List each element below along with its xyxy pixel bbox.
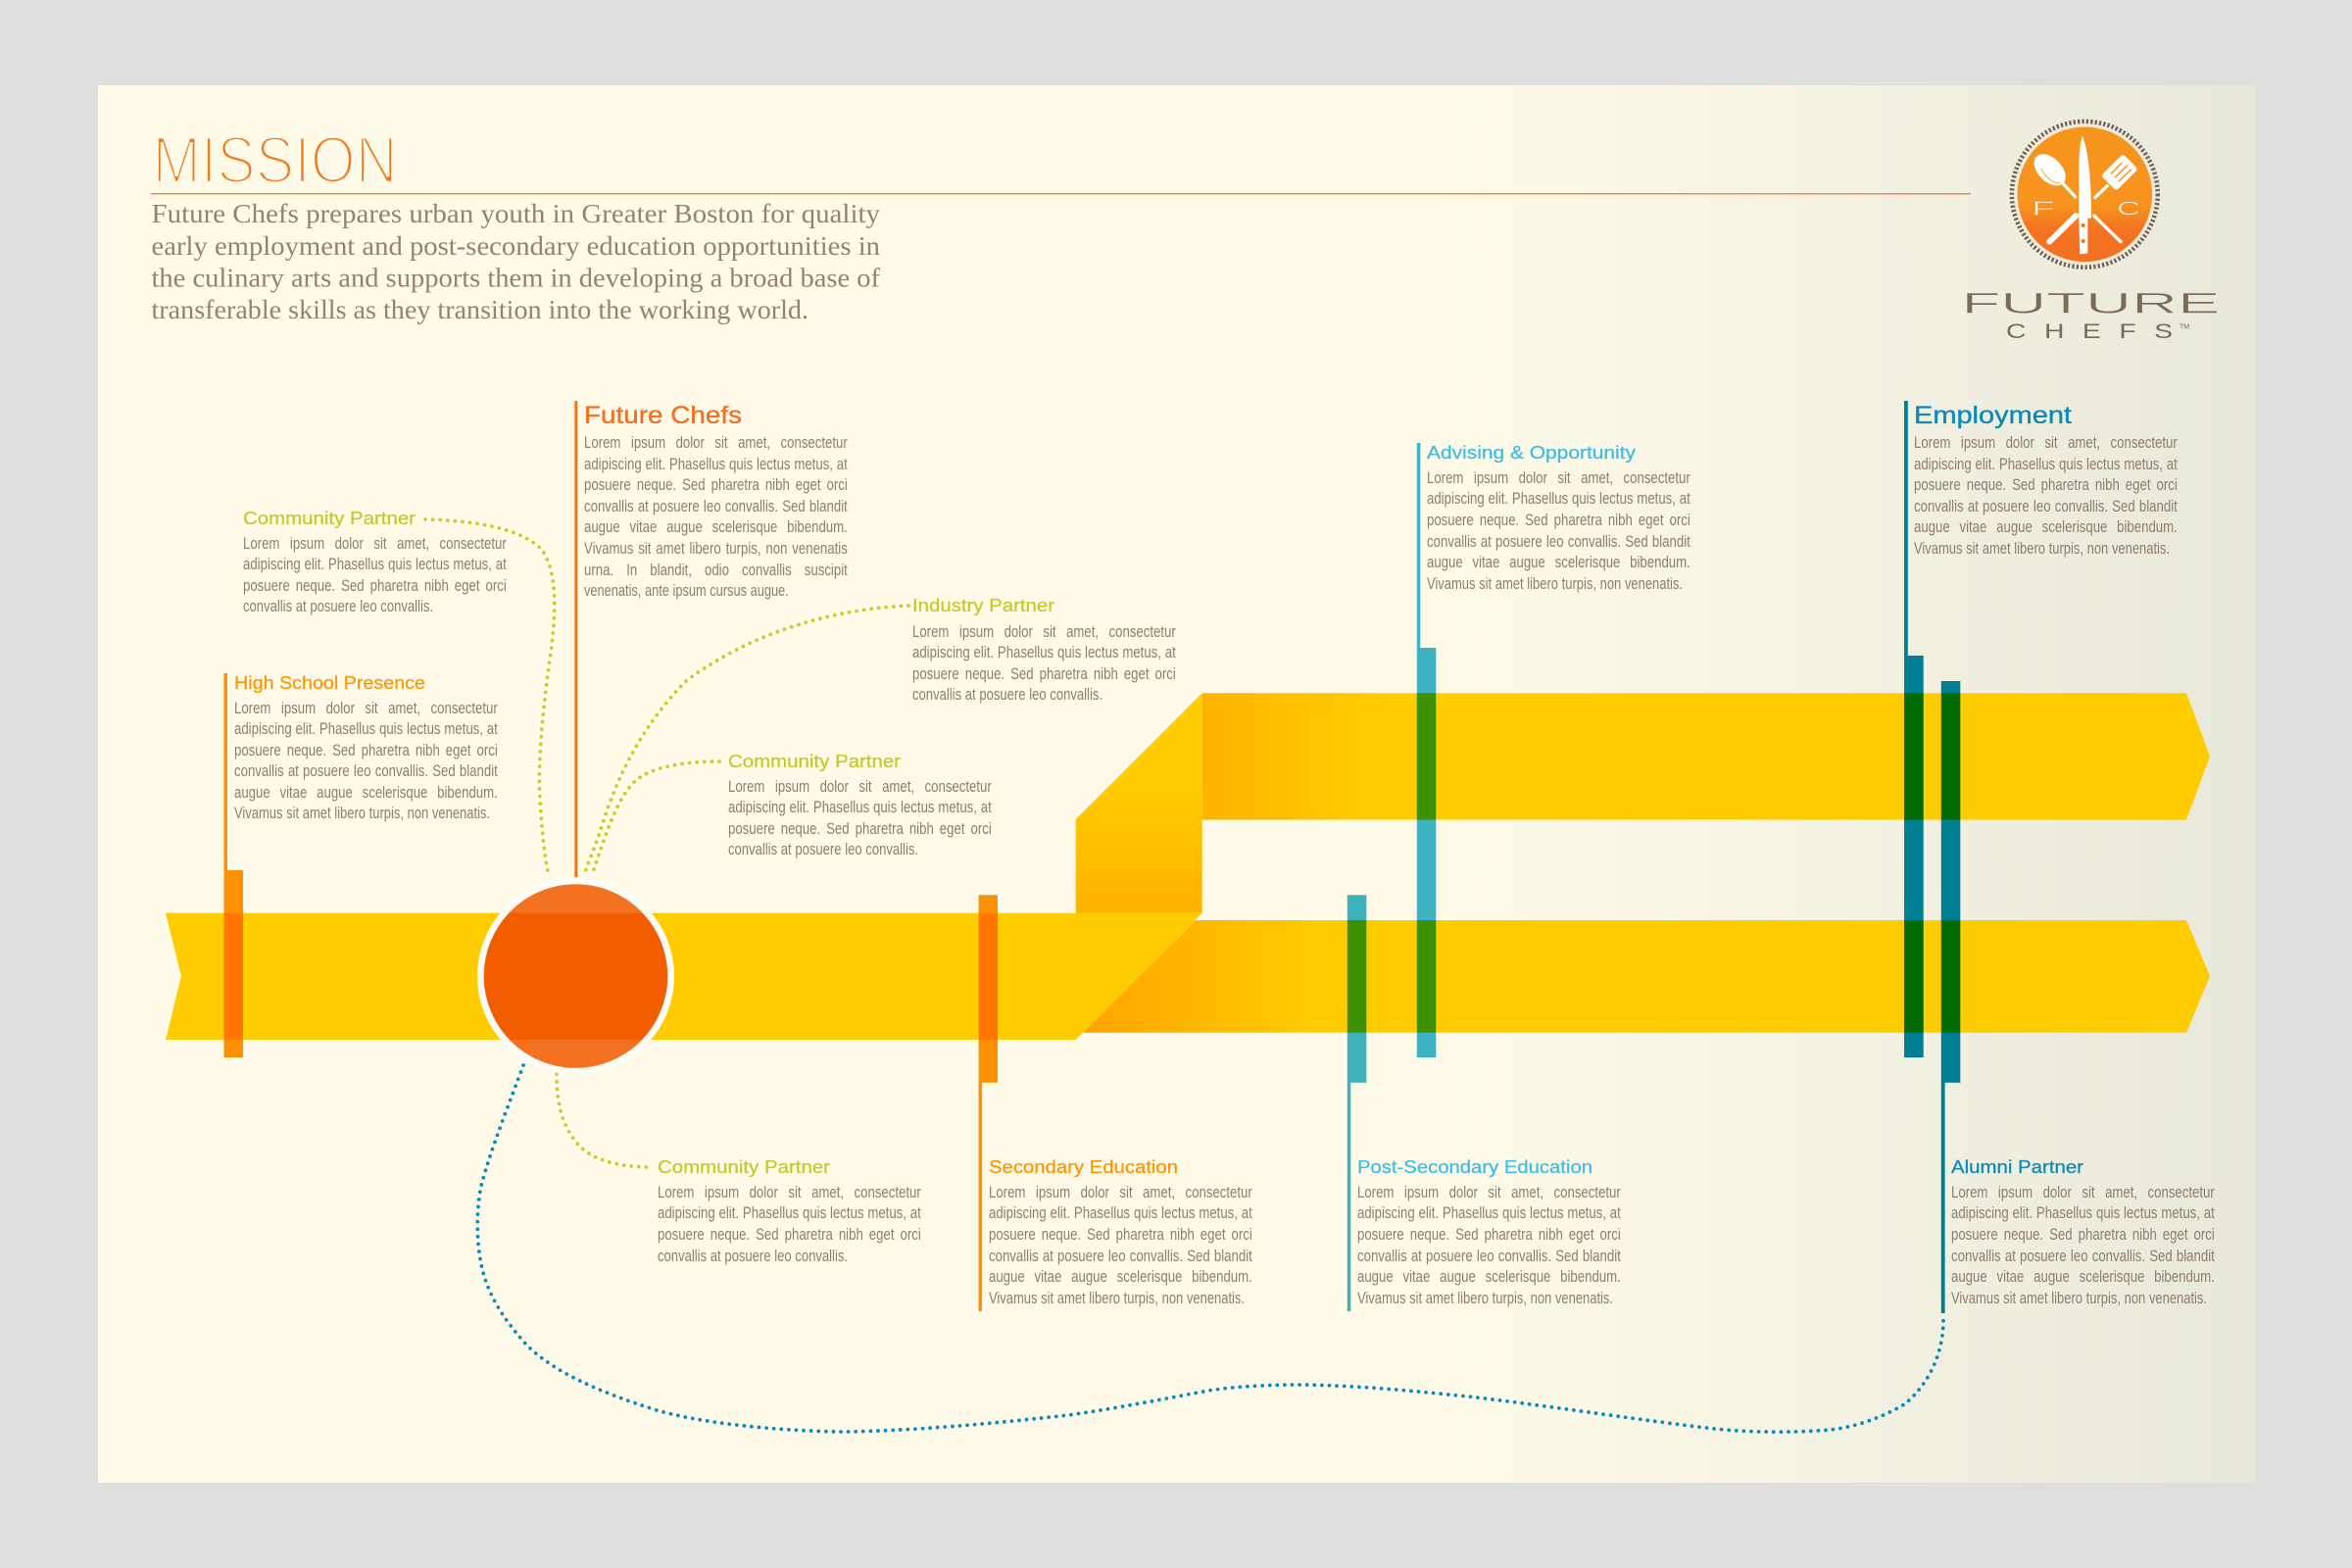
body copy: posuere neque. Sed pharetra nibh eget orci — [911, 665, 1175, 683]
body copy — [1914, 434, 2178, 558]
text block: community partner bottom — [657, 1157, 921, 1265]
title rule — [151, 193, 1971, 194]
body copy: adipiscing elit. Phasellus quis lectus metus, at — [988, 1204, 1251, 1222]
body copy: convallis at posuere leo convallis. Sed blandit — [1914, 498, 2178, 515]
body copy: Lorem ipsum dolor sit amet, consectetur — [234, 700, 498, 717]
body copy — [657, 1184, 921, 1265]
body copy: augue vitae augue scelerisque bibendum. — [1357, 1268, 1621, 1286]
bar: employment — [1904, 401, 1924, 1057]
body copy: augue vitae augue scelerisque bibendum. — [234, 784, 498, 802]
body copy: posuere neque. Sed pharetra nibh eget orci — [1951, 1226, 2215, 1244]
dotted connector: community partner right — [592, 761, 719, 875]
body copy: Lorem ipsum dolor sit amet, consectetur — [243, 535, 507, 553]
heading: Advising & Opportunity — [1427, 443, 1636, 463]
body copy: convallis at posuere leo convallis. — [911, 686, 1102, 704]
text block: community partner middle — [728, 752, 992, 858]
hub circle — [484, 884, 667, 1068]
body copy: convallis at posuere leo convallis. Sed blandit — [584, 498, 848, 515]
text block: employment — [1914, 402, 2178, 558]
body copy: adipiscing elit. Phasellus quis lectus metus, at — [1914, 456, 2178, 473]
body copy: Vivamus sit amet libero turpis, non venenatis. — [234, 805, 490, 822]
bar: advising and opportunity — [1417, 443, 1436, 1057]
logo wordmark: FUTURE — [1962, 287, 2221, 319]
mission statement: the culinary arts and supports them in developing a broad base of — [151, 263, 880, 292]
heading: Employment — [1914, 402, 2072, 429]
body copy: posuere neque. Sed pharetra nibh eget orci — [1357, 1226, 1621, 1244]
text block: future chefs — [584, 402, 848, 600]
heading: Future Chefs — [584, 402, 742, 429]
body copy: adipiscing elit. Phasellus quis lectus metus, at — [728, 799, 992, 816]
body copy: venenatis, ante ipsum cursus augue. — [584, 582, 789, 600]
bar: future chefs stem — [574, 401, 577, 877]
body copy: Lorem ipsum dolor sit amet, consectetur — [1914, 434, 2178, 452]
mission statement: Future Chefs prepares urban youth in Greater Boston for quality — [151, 199, 881, 228]
body copy — [243, 535, 507, 615]
body copy: Lorem ipsum dolor sit amet, consectetur — [728, 778, 992, 796]
body copy — [1951, 1184, 2215, 1307]
bar: alumni partner — [1941, 681, 1960, 1313]
text block: high school presence — [234, 673, 498, 822]
heading: Post-Secondary Education — [1357, 1157, 1592, 1177]
body copy: urna. In blandit, odio convallis suscipit — [584, 562, 848, 579]
body copy: augue vitae augue scelerisque bibendum. — [988, 1268, 1251, 1286]
body copy: Vivamus sit amet libero turpis, non venenatis. — [1914, 540, 2170, 558]
body copy: Lorem ipsum dolor sit amet, consectetur — [1427, 469, 1690, 487]
heading: Alumni Partner — [1951, 1157, 2083, 1177]
body copy: posuere neque. Sed pharetra nibh eget orci — [728, 820, 992, 838]
body copy: Lorem ipsum dolor sit amet, consectetur — [911, 623, 1175, 641]
body copy: adipiscing elit. Phasellus quis lectus metus, at — [657, 1204, 920, 1222]
text block: secondary education — [988, 1157, 1252, 1307]
body copy: posuere neque. Sed pharetra nibh eget orci — [988, 1226, 1251, 1244]
body copy: augue vitae augue scelerisque bibendum. — [1914, 518, 2178, 536]
body copy: posuere neque. Sed pharetra nibh eget orci — [1427, 512, 1690, 529]
mission statement: early employment and post-secondary education opportunities in — [151, 231, 881, 261]
logo wordmark: TM — [2180, 323, 2189, 331]
body copy: posuere neque. Sed pharetra nibh eget orci — [657, 1226, 920, 1244]
body copy — [584, 434, 848, 600]
body copy: Lorem ipsum dolor sit amet, consectetur — [657, 1184, 920, 1201]
body copy — [1357, 1184, 1621, 1307]
dotted connector: community partner top — [425, 519, 555, 877]
dotted connector: industry partner — [584, 606, 908, 875]
body copy: adipiscing elit. Phasellus quis lectus metus, at — [584, 456, 848, 473]
text block: post-secondary education — [1357, 1157, 1621, 1307]
heading: Community Partner — [657, 1157, 829, 1177]
logo badge — [2012, 122, 2158, 268]
body copy: convallis at posuere leo convallis. Sed blandit — [1427, 533, 1690, 551]
body copy: posuere neque. Sed pharetra nibh eget orci — [1914, 476, 2178, 494]
body copy: convallis at posuere leo convallis. — [243, 598, 433, 615]
mission statement — [151, 199, 881, 324]
logo letter C: C — [2117, 198, 2140, 220]
body copy: convallis at posuere leo convallis. — [728, 841, 918, 858]
bar: post-secondary education — [1348, 895, 1366, 1311]
body copy: adipiscing elit. Phasellus quis lectus metus, at — [1357, 1204, 1621, 1222]
logo wordmark — [1962, 287, 2221, 343]
text block: alumni partner — [1950, 1157, 2215, 1307]
heading: Community Partner — [243, 509, 416, 528]
body copy: Lorem ipsum dolor sit amet, consectetur — [988, 1184, 1251, 1201]
body copy — [911, 623, 1176, 704]
body copy: convallis at posuere leo convallis. — [657, 1248, 848, 1265]
text block: community partner top left — [243, 509, 507, 615]
ribbon: lower track — [1083, 920, 2210, 1033]
bar: high school presence — [223, 673, 243, 1057]
ribbon: main start — [166, 913, 1202, 1040]
text block: advising and opportunity — [1427, 443, 1690, 593]
body copy: adipiscing elit. Phasellus quis lectus metus, at — [1427, 490, 1690, 508]
body copy: Lorem ipsum dolor sit amet, consectetur — [1357, 1184, 1621, 1201]
body copy: Vivamus sit amet libero turpis, non venenatis. — [1427, 575, 1683, 593]
body copy: posuere neque. Sed pharetra nibh eget orci — [584, 476, 848, 494]
body copy: Vivamus sit amet libero turpis, non venenatis. — [1357, 1290, 1613, 1307]
heading: Community Partner — [728, 752, 901, 771]
logo wordmark: CHEFS — [2006, 319, 2191, 343]
body copy — [234, 700, 498, 822]
heading: Industry Partner — [911, 596, 1054, 615]
body copy: posuere neque. Sed pharetra nibh eget orci — [234, 742, 498, 760]
heading: High School Presence — [234, 673, 425, 693]
ribbon: upper track — [1202, 693, 2210, 819]
body copy: convallis at posuere leo convallis. Sed blandit — [988, 1248, 1251, 1265]
heading: Secondary Education — [988, 1157, 1178, 1177]
body copy: Lorem ipsum dolor sit amet, consectetur — [1951, 1184, 2215, 1201]
dotted connector: alumni loop — [477, 1065, 1943, 1432]
body copy: augue vitae augue scelerisque bibendum. — [1427, 554, 1690, 571]
body copy: convallis at posuere leo convallis. Sed blandit — [1951, 1248, 2215, 1265]
body copy: Vivamus sit amet libero turpis, non venenatis. — [988, 1290, 1245, 1307]
logo: Future Chefs — [1962, 122, 2221, 343]
body copy — [728, 778, 992, 858]
ribbon: fold — [1076, 693, 1202, 913]
body copy: adipiscing elit. Phasellus quis lectus metus, at — [911, 644, 1175, 662]
bar: secondary education — [979, 895, 998, 1311]
text block: industry partner — [911, 596, 1176, 704]
body copy: Vivamus sit amet libero turpis, non venenatis. — [1951, 1290, 2207, 1307]
logo letter F: F — [2032, 198, 2055, 220]
body copy — [1427, 469, 1690, 593]
body copy: augue vitae augue scelerisque bibendum. — [1951, 1268, 2215, 1286]
mission title: MISSION — [153, 123, 398, 198]
mission statement: transferable skills as they transition into the working world. — [151, 295, 808, 324]
body copy: convallis at posuere leo convallis. Sed blandit — [234, 762, 498, 780]
body copy — [988, 1184, 1252, 1307]
hub ring — [480, 881, 670, 1071]
body copy: adipiscing elit. Phasellus quis lectus metus, at — [1951, 1204, 2215, 1222]
body copy: Lorem ipsum dolor sit amet, consectetur — [584, 434, 848, 452]
body copy: adipiscing elit. Phasellus quis lectus metus, at — [234, 720, 498, 738]
body copy: convallis at posuere leo convallis. Sed blandit — [1357, 1248, 1621, 1265]
body copy: adipiscing elit. Phasellus quis lectus metus, at — [243, 556, 507, 573]
body copy: Vivamus sit amet libero turpis, non venenatis — [584, 540, 848, 558]
body copy: posuere neque. Sed pharetra nibh eget orci — [243, 577, 507, 595]
dotted connector: community partner bottom — [557, 1074, 647, 1167]
body copy: augue vitae augue scelerisque bibendum. — [584, 518, 848, 536]
